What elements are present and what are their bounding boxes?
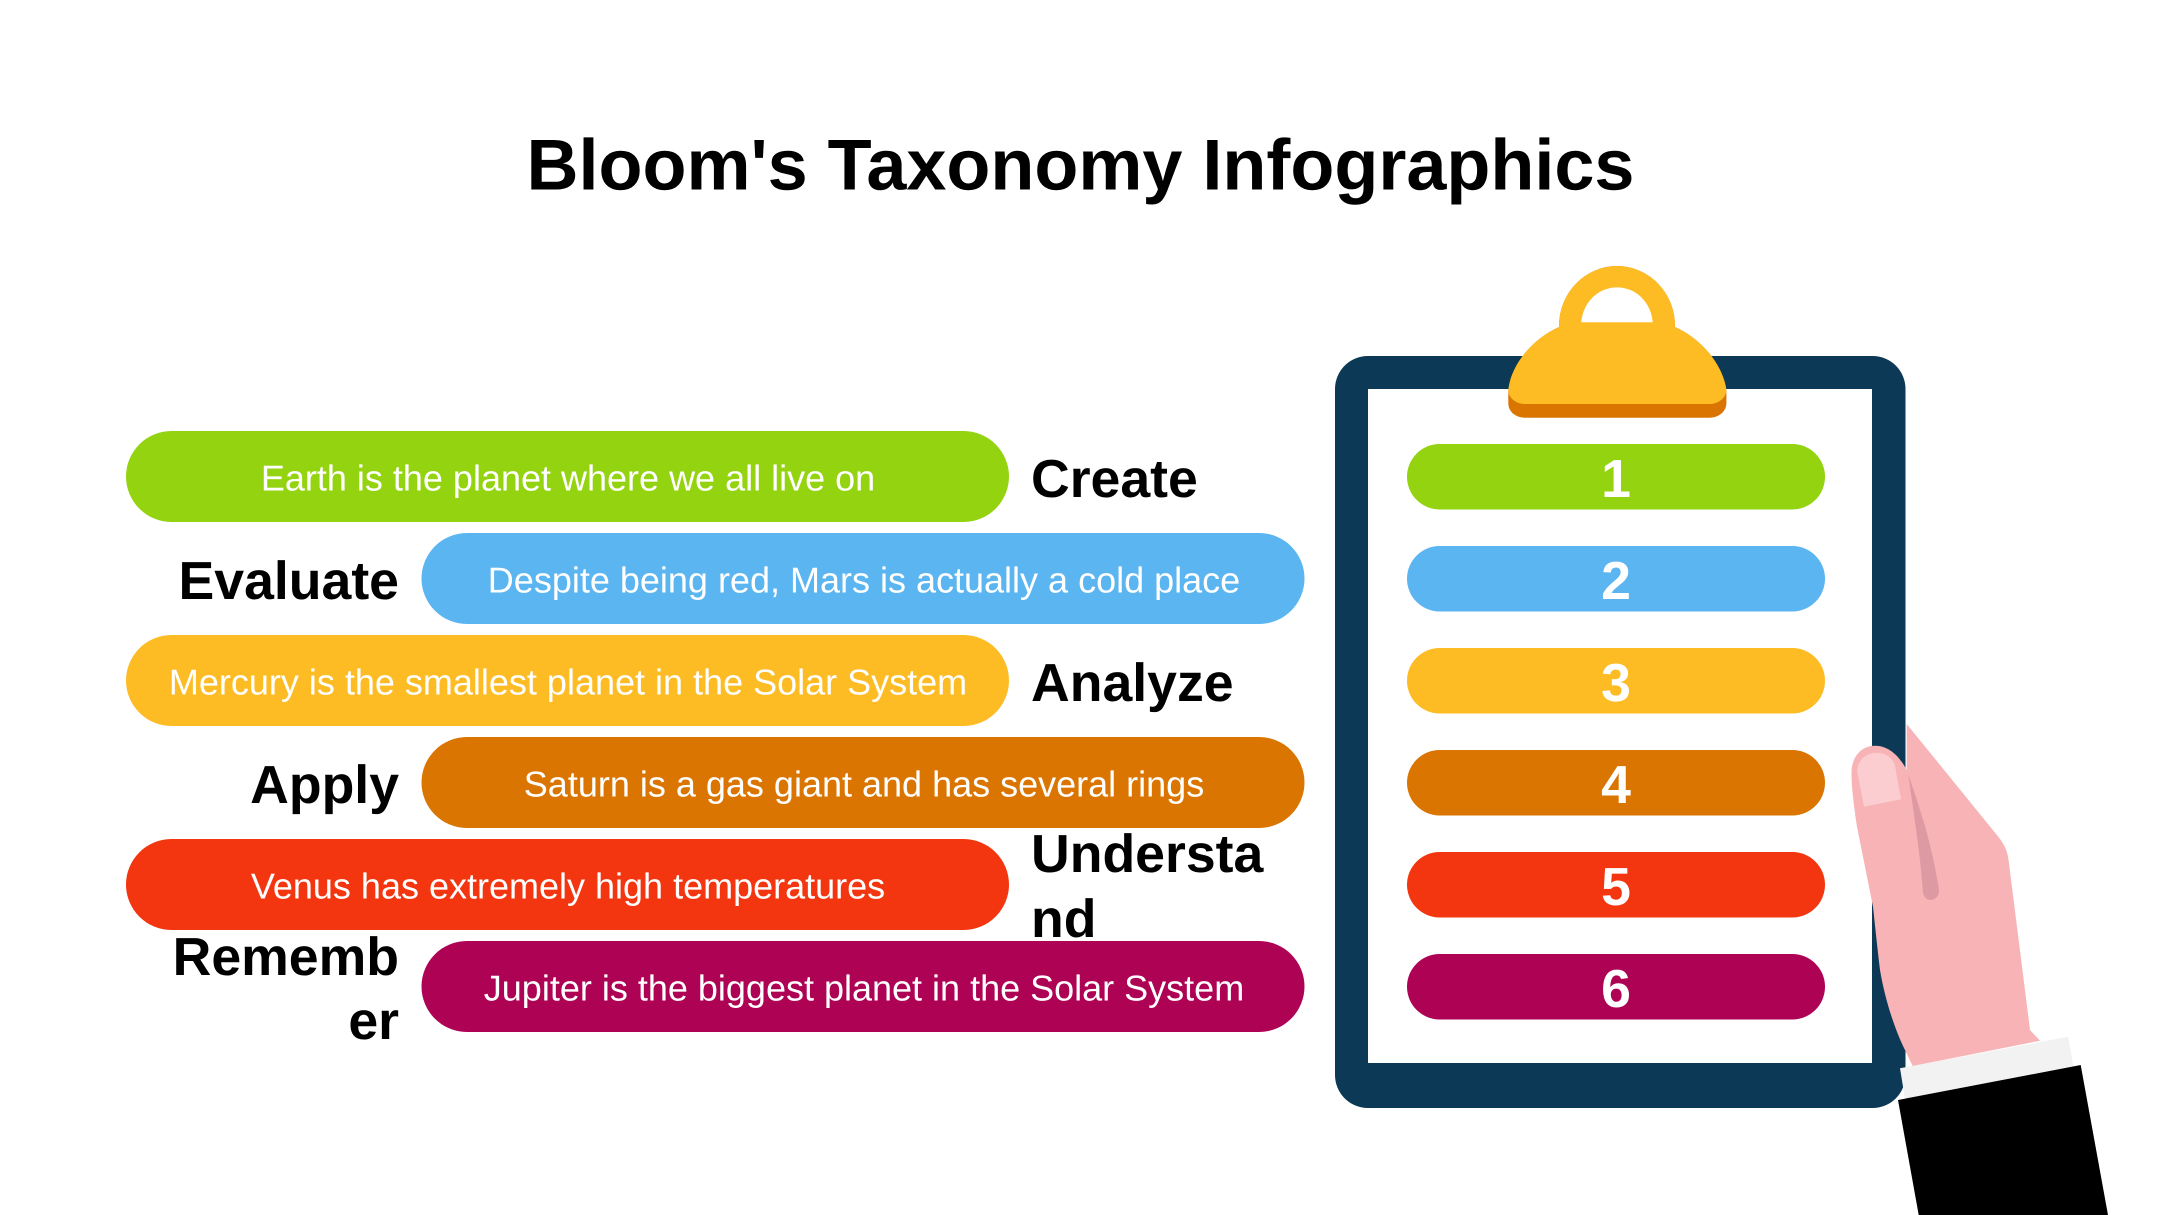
row 4: apply: [250, 737, 1304, 828]
title: Bloom's Taxonomy Infographics: [527, 126, 1634, 206]
thumbnail: [1857, 753, 1901, 807]
pill 4: 4: [1601, 755, 1631, 815]
icon: hand holding clipboard: [1852, 724, 2108, 1215]
row 6: remember: er: [348, 991, 399, 1051]
pill 1: 1: [1601, 449, 1631, 509]
pill 2: 2: [1601, 551, 1631, 611]
icon: clipboard clip: [1508, 266, 1726, 418]
pill 6: [1407, 954, 1825, 1020]
pill 6: 6: [1601, 959, 1631, 1019]
number pills: [1407, 444, 1825, 1020]
pill 4: [1407, 750, 1825, 816]
row 1: create: [126, 431, 1198, 522]
pill 3: [1407, 648, 1825, 714]
pill 5: 5: [1601, 857, 1631, 917]
row 6: remember: [173, 927, 1304, 1051]
row 1: create: Create: [1031, 449, 1198, 509]
row 6: remember: Jupiter is the biggest planet in the Solar System: [484, 968, 1244, 1008]
row 3: analyze: Analyze: [1031, 653, 1234, 713]
pill 1: [1407, 444, 1825, 510]
row 3: analyze: [126, 635, 1234, 726]
row 2: evaluate: Evaluate: [179, 551, 399, 611]
row 6: remember: Rememb: [173, 927, 399, 987]
row 5: understand: [126, 824, 1264, 949]
row 1: create: Earth is the planet where we all live on: [261, 458, 875, 498]
pill 2: [1407, 546, 1825, 612]
hand: [1852, 724, 2040, 1066]
row 2: evaluate: Despite being red, Mars is actually a cold place: [488, 560, 1240, 600]
row 4: apply: Apply: [250, 755, 399, 815]
jacket sleeve: [1898, 1065, 2108, 1215]
row 5: understand: nd: [1031, 889, 1096, 949]
row 2: evaluate: [179, 533, 1304, 624]
shirt cuff: [1900, 1037, 2073, 1099]
row 5: understand: Venus has extremely high temperatures: [251, 866, 885, 906]
row 4: apply: Saturn is a gas giant and has several rings: [524, 764, 1204, 804]
pill 3: 3: [1601, 653, 1631, 713]
clipboard board: [1335, 356, 1906, 1108]
row 5: understand: Understa: [1031, 824, 1264, 884]
pill 5: [1407, 852, 1825, 918]
crease: [1908, 775, 1939, 900]
row 3: analyze: Mercury is the smallest planet in the Solar System: [169, 662, 967, 702]
